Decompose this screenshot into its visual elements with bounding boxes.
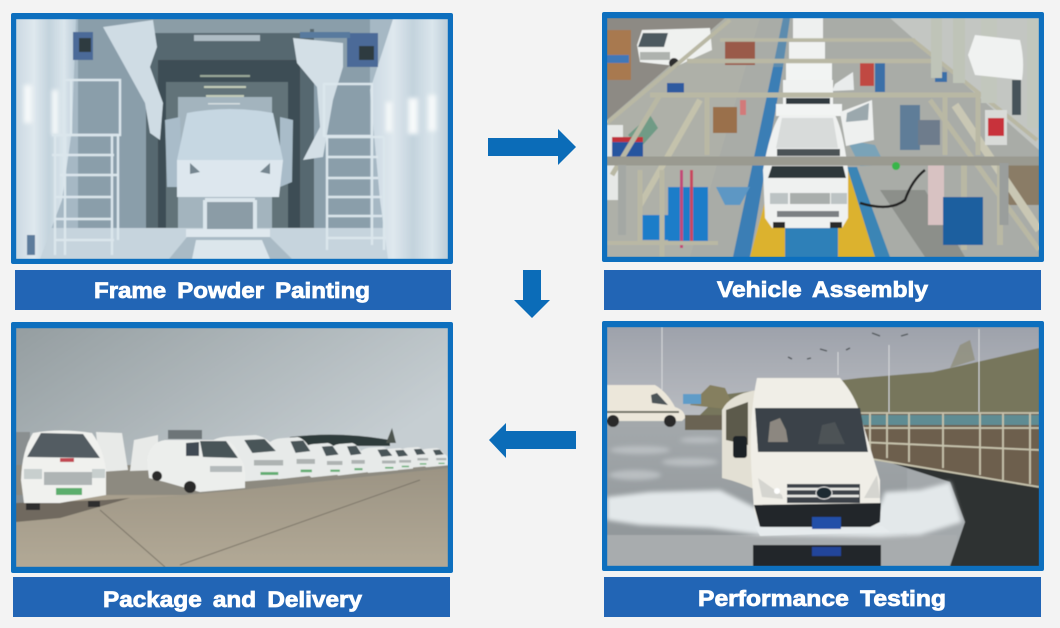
caption: Vehicle Assembly: Vehicle Assembly xyxy=(717,277,929,302)
embankment xyxy=(894,463,1039,566)
test van xyxy=(722,390,760,492)
photo: assembly line xyxy=(607,18,1039,257)
floor xyxy=(40,227,388,259)
splash xyxy=(607,482,962,537)
receding vans xyxy=(420,448,448,467)
water xyxy=(607,476,906,535)
parked van xyxy=(637,28,712,66)
arrow: right, painting to assembly xyxy=(488,129,576,165)
photo: row of parked vans xyxy=(16,328,448,567)
van body xyxy=(165,117,182,187)
vans in queue xyxy=(793,18,823,40)
robot arms xyxy=(103,20,163,140)
caption: Performance Testing xyxy=(604,577,1041,617)
distant white van xyxy=(607,385,685,421)
panel: package and delivery xyxy=(11,322,453,573)
arrow: left, testing to delivery xyxy=(489,423,576,458)
caption: Package and Delivery xyxy=(13,577,450,617)
arrow: down, assembly to testing xyxy=(514,270,550,318)
street lamps xyxy=(662,327,979,412)
photo: van driving through water xyxy=(607,327,1039,566)
rear vans xyxy=(96,432,128,472)
main van xyxy=(763,115,848,228)
columns at right xyxy=(931,18,942,78)
caption: Package and Delivery: Package and Delivery xyxy=(103,587,363,612)
photo: van frame in paint booth xyxy=(16,19,448,259)
sensors xyxy=(73,32,93,60)
panel: vehicle assembly xyxy=(602,12,1044,262)
left stand xyxy=(52,80,120,255)
panel: performance testing xyxy=(602,321,1044,571)
right stand xyxy=(324,84,386,250)
left shelves xyxy=(607,30,631,80)
right side clutter xyxy=(860,62,874,86)
main cross beam xyxy=(607,156,1039,166)
panel: frame powder painting xyxy=(11,13,453,264)
tree line xyxy=(700,348,1039,416)
overhead beams xyxy=(607,20,1039,257)
front van xyxy=(21,430,106,503)
signs xyxy=(612,141,644,158)
caption: Vehicle Assembly xyxy=(604,270,1041,310)
fence xyxy=(860,412,1039,487)
side-on van xyxy=(147,440,245,492)
blue bins xyxy=(668,187,708,243)
caption: Frame Powder Painting xyxy=(15,270,451,310)
open door xyxy=(840,100,874,146)
caption: Frame Powder Painting: Frame Powder Painting xyxy=(94,278,370,303)
reflection xyxy=(753,545,881,566)
curtains xyxy=(16,19,76,259)
caption: Performance Testing: Performance Testing xyxy=(698,586,946,611)
barrel and hose xyxy=(943,197,983,245)
floor lanes xyxy=(733,67,783,257)
